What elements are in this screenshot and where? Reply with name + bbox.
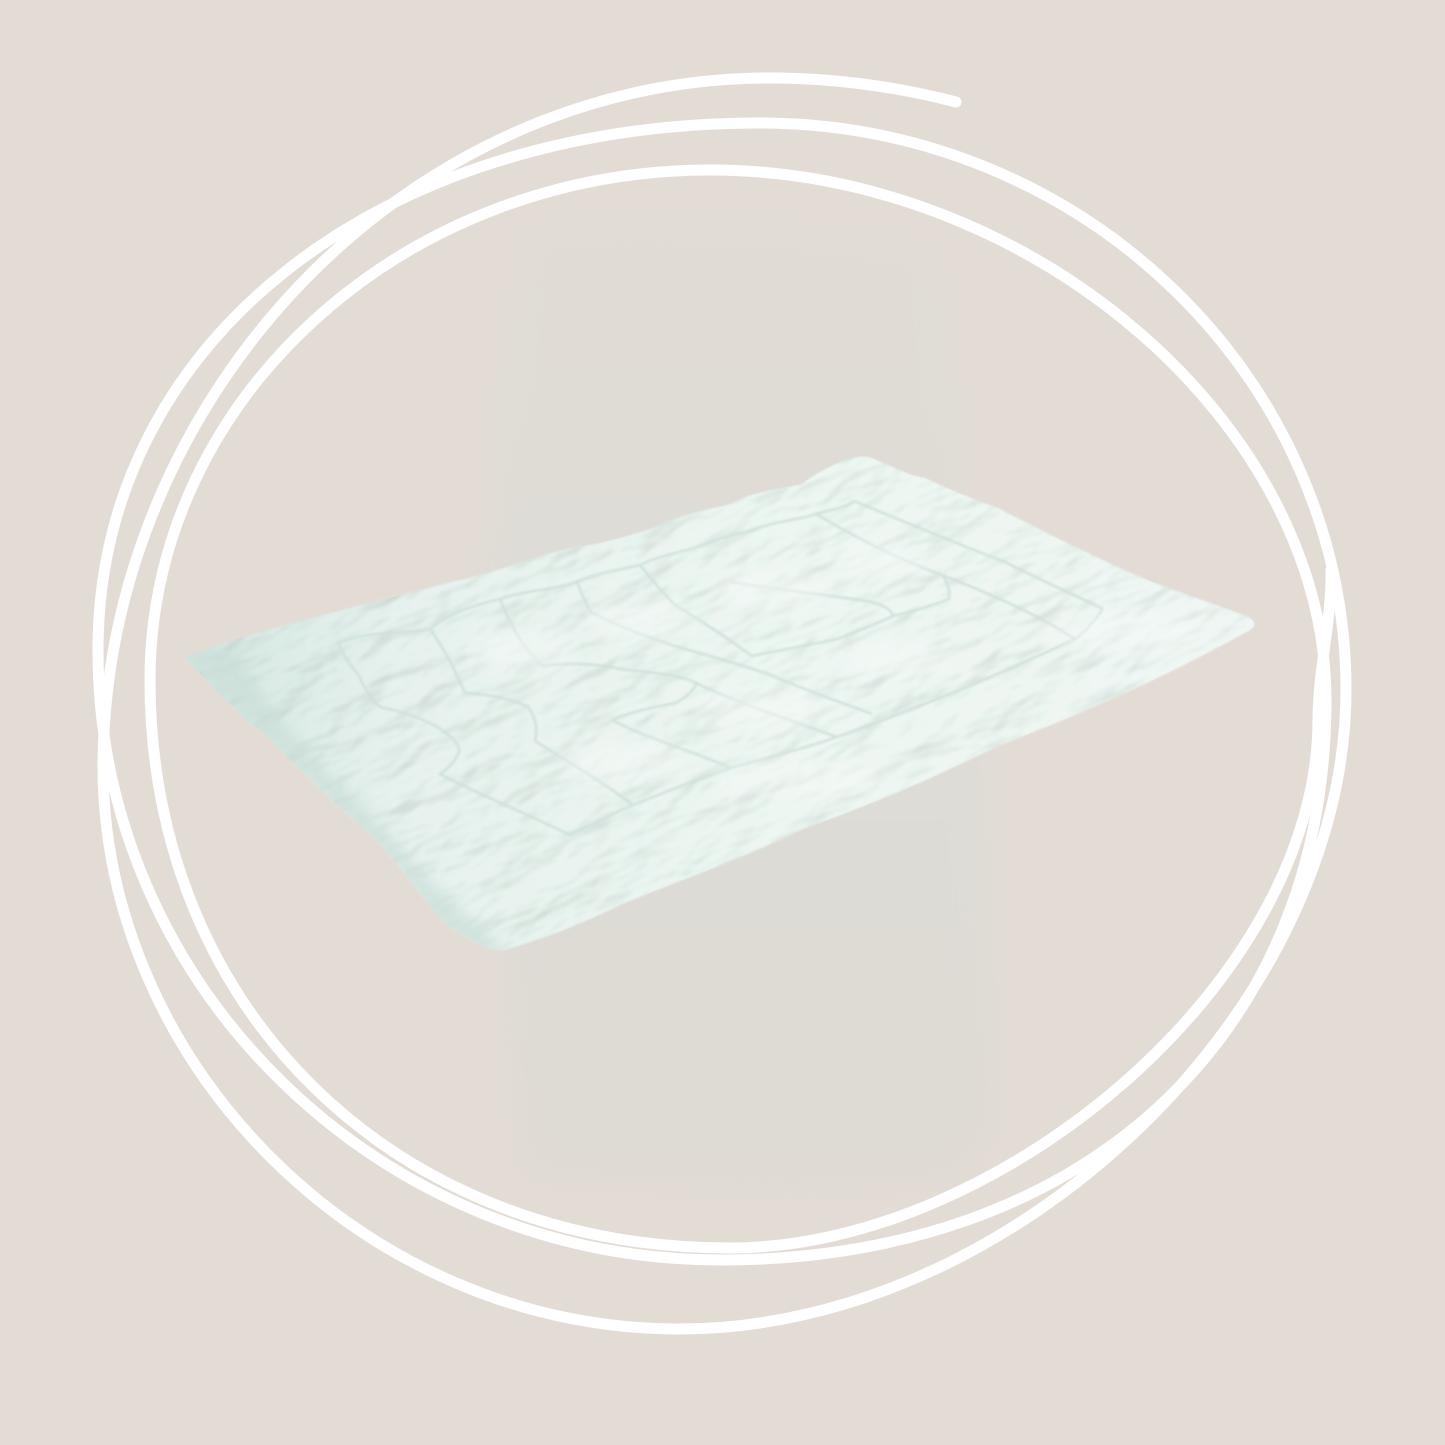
quilt puffed highlights — [480, 544, 1132, 794]
quilt — [185, 456, 1255, 950]
quilt body — [185, 456, 1255, 950]
quilt fabric wrinkle texture — [226, 459, 1246, 935]
quilt seams — [338, 501, 1103, 835]
quilt shaded left edge — [195, 656, 502, 950]
faint pillow silhouette behind quilt — [486, 206, 1000, 1190]
hand-drawn scribble circle — [98, 78, 1346, 1329]
